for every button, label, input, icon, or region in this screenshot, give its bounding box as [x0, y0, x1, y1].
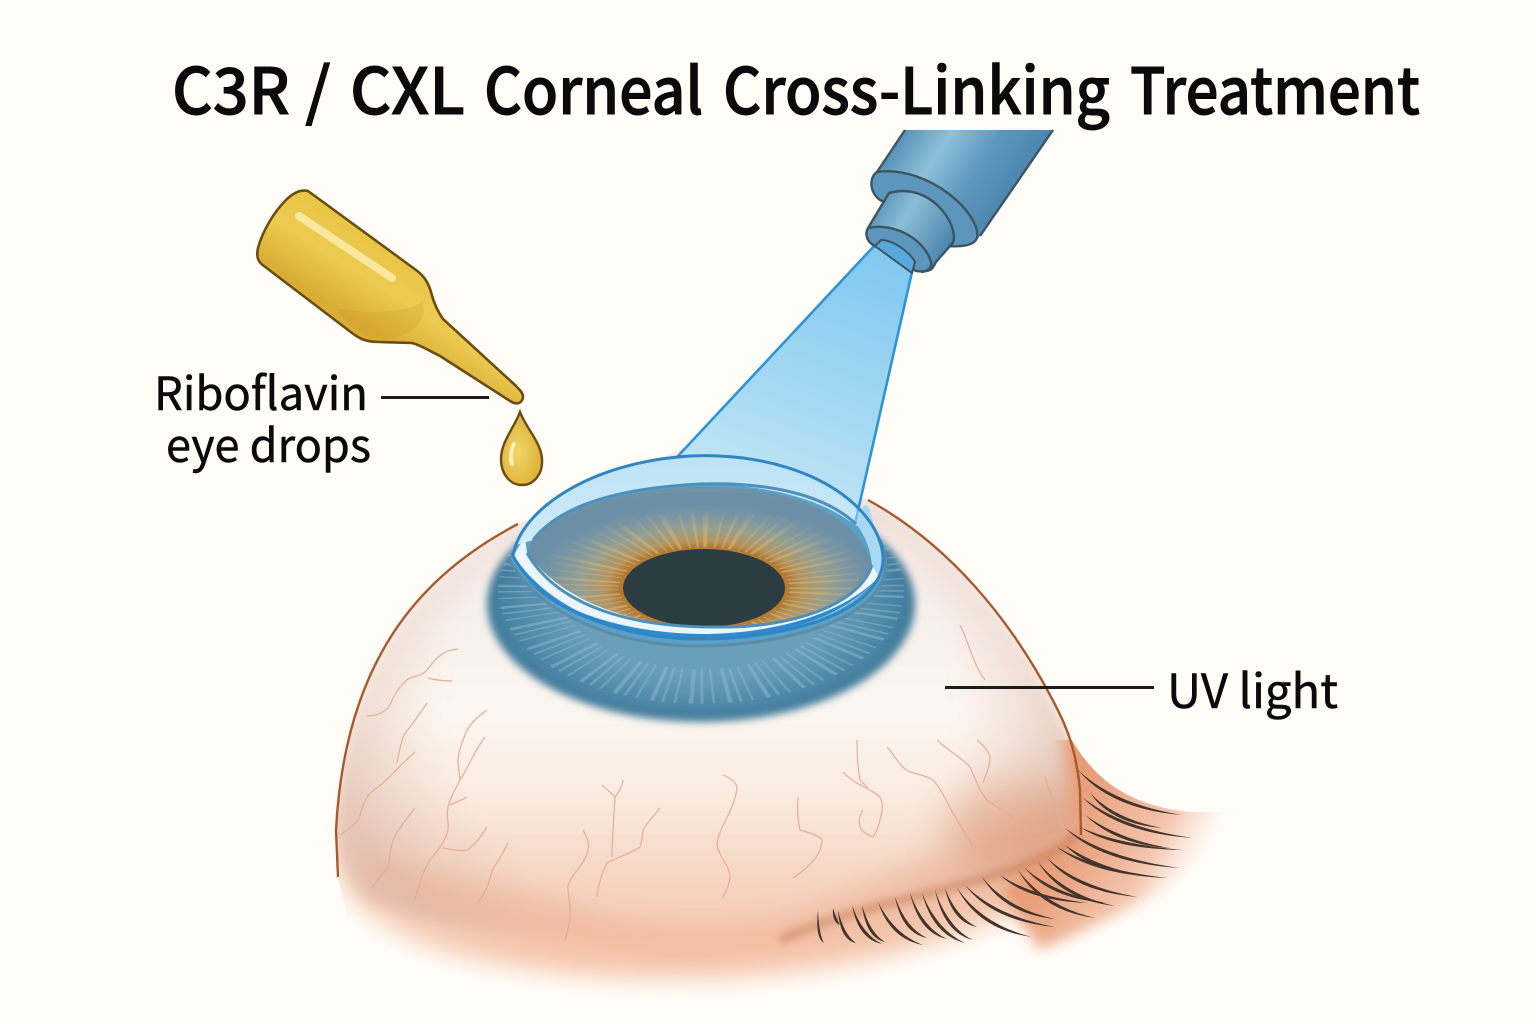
- label: uv light: UV light: [1167, 653, 1338, 722]
- lens upper band: [516, 457, 872, 545]
- label: riboflavin eye drops: [154, 358, 371, 476]
- blue iris outer ring: [487, 486, 915, 722]
- ampoule highlight: [299, 216, 392, 278]
- iris outer rays: [529, 494, 873, 686]
- cornea contact lens: [504, 245, 912, 684]
- title: Treatment: [1130, 41, 1420, 133]
- sclera veins: [340, 625, 1063, 940]
- lower orange shade: [386, 811, 1067, 958]
- iris gradient and amber rays: [548, 512, 861, 626]
- title: CXL: [350, 41, 465, 133]
- title: C3R: [172, 41, 290, 133]
- device neck: [868, 191, 954, 272]
- device flange: [871, 171, 977, 246]
- device aperture: [875, 240, 915, 273]
- lash-side skin wedge: [1000, 720, 1220, 950]
- riboflavin drop: [501, 412, 542, 485]
- leader line: riboflavin: [381, 396, 489, 399]
- ampoule shadow band: [335, 302, 424, 339]
- lens shadow ring: [509, 540, 886, 646]
- pupil: [623, 549, 785, 627]
- label: riboflavin eye drops: Riboflavin: [154, 358, 368, 424]
- title: [172, 41, 1420, 133]
- title: /: [305, 41, 331, 133]
- device tip collar: [866, 227, 931, 271]
- light beam: [678, 245, 912, 524]
- inner iris: [527, 487, 872, 630]
- lens shadow body: [509, 456, 887, 646]
- laser device: [866, 130, 1053, 273]
- leader line: uv light: [945, 686, 1154, 689]
- drop highlight: [511, 444, 514, 464]
- eyelashes: [817, 770, 1193, 945]
- lens lower highlight: [514, 538, 879, 638]
- device barrel: [877, 130, 1053, 246]
- beam edges: [678, 245, 912, 524]
- title: Cross-Linking: [723, 41, 1110, 133]
- lens right flank: [856, 505, 883, 578]
- lens top glass: [516, 457, 872, 545]
- riboflavin ampoule: [257, 190, 523, 403]
- lens outer rim: [513, 456, 883, 639]
- eyeball: [304, 440, 1220, 979]
- label: riboflavin eye drops: eye drops: [166, 410, 371, 476]
- sclera outline: [336, 500, 1081, 877]
- lens inner rim: [527, 484, 872, 627]
- right side warm shading: [945, 782, 1115, 878]
- eyelid crease shadow: [780, 835, 1078, 940]
- title: Corneal: [484, 41, 703, 133]
- sclera and soft lower fade: [304, 440, 1120, 979]
